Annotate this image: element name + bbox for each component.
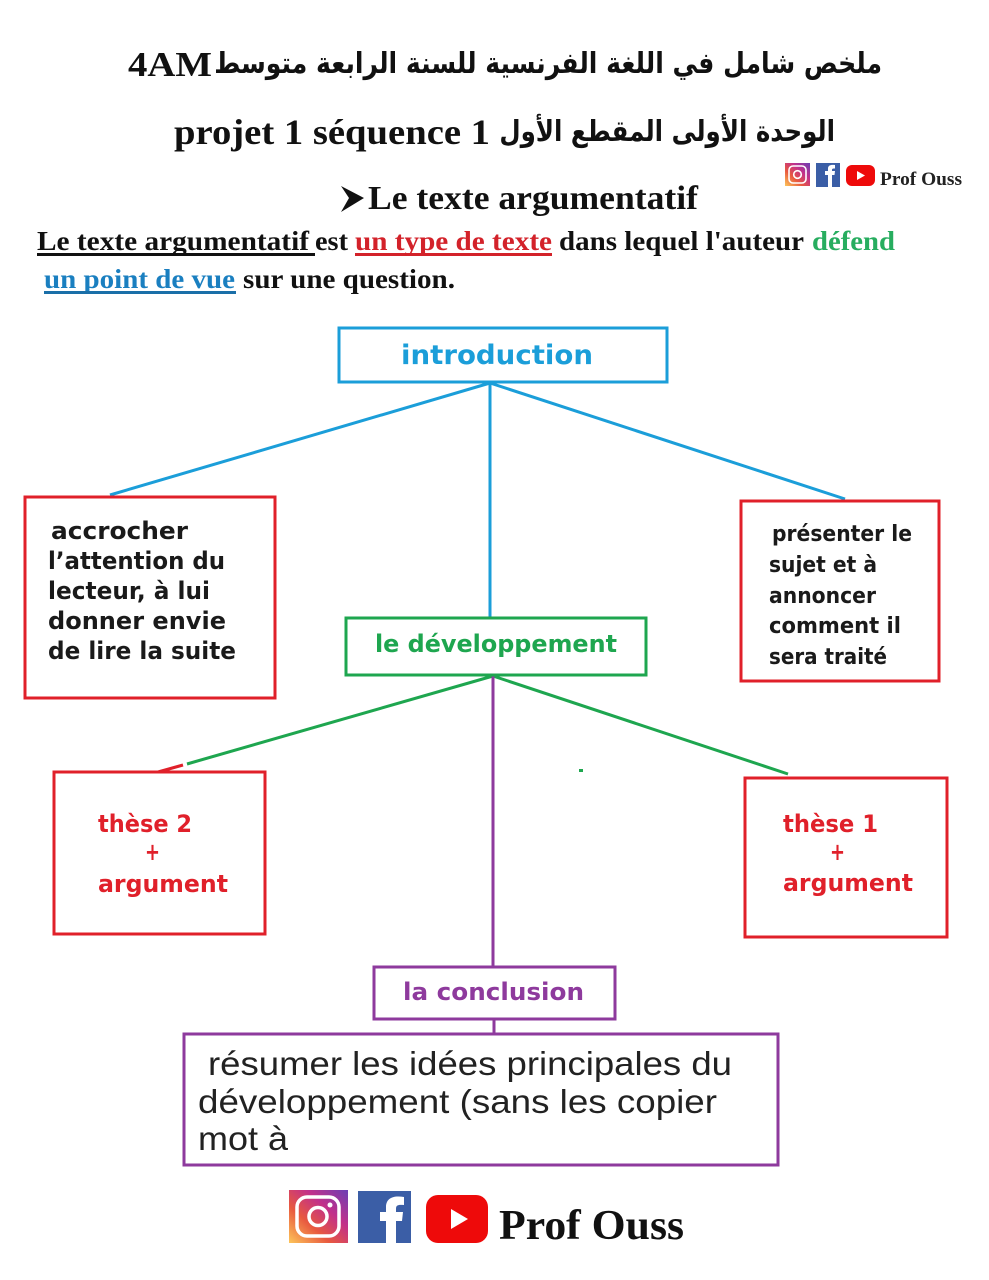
definition text: un type de texte: [355, 226, 552, 256]
box: accrocher: l’attention du: [48, 547, 225, 575]
box: introduction: [339, 328, 667, 382]
icon: instagram small: [785, 163, 810, 186]
icon: facebook small: [816, 163, 840, 187]
icon: facebook: [358, 1191, 411, 1243]
definition text: un point de vue: [44, 264, 235, 294]
box: accrocher: lecteur, à lui: [48, 577, 210, 605]
title: second line: [174, 112, 835, 152]
box: présenter le sujet: sujet et à: [769, 553, 877, 578]
box: présenter le sujet: présenter le: [772, 522, 912, 547]
title: first line: 4AM: [128, 45, 212, 84]
green dot: [579, 769, 583, 772]
definition text: est: [315, 226, 348, 256]
box: le développement: le développement: [375, 630, 617, 658]
box: thèse 1: argument: [783, 869, 913, 897]
title: second line: projet 1 séquence 1: [174, 112, 490, 152]
box: présenter le sujet: annoncer: [769, 584, 876, 609]
title: first line: ملخص شامل في اللغة الفرنسية للسنة الرابعة متوسط: [214, 47, 882, 80]
connectors: développement (green): [187, 676, 788, 774]
box: le développement: [346, 618, 646, 675]
box: résumer les idées: mot à: [198, 1120, 289, 1157]
box: résumer les idées: résumer les idées principales du: [208, 1045, 732, 1082]
box: la conclusion: [374, 967, 615, 1019]
connectors: introduction (blue): [110, 383, 845, 617]
connector: conclusion to summary: [492, 1019, 496, 1034]
box: thèse 2: thèse 2: [98, 810, 192, 838]
box: thèse 1: +: [830, 838, 845, 866]
name: bottom: Prof Ouss: [499, 1203, 684, 1249]
box: thèse 1: [745, 778, 947, 937]
connector: red fragment: [158, 765, 183, 772]
box: accrocher: [25, 497, 275, 698]
social icons and name: bottom: [289, 1190, 684, 1249]
box: accrocher: accrocher: [51, 517, 188, 545]
box: présenter le sujet: comment il: [769, 614, 901, 639]
box: accrocher: donner envie: [48, 607, 226, 635]
box: la conclusion: la conclusion: [403, 978, 584, 1006]
definition text: Le texte argumentatif: [37, 226, 310, 256]
box: présenter le sujet: [741, 501, 939, 681]
title: second line: الوحدة الأولى المقطع الأول: [499, 113, 835, 149]
box: accrocher: de lire la suite: [48, 637, 236, 665]
box: résumer les idées: [184, 1034, 778, 1165]
icon: instagram: [289, 1190, 348, 1243]
definition text: sur une question.: [243, 264, 455, 294]
name: top: Prof Ouss: [880, 169, 962, 190]
definition text: [37, 226, 895, 294]
box: thèse 2: [54, 772, 265, 934]
icon: youtube: [426, 1195, 488, 1243]
icon: youtube small: [846, 165, 875, 186]
definition text: dans lequel l'auteur: [559, 226, 804, 256]
definition text: défend: [812, 226, 895, 256]
box: thèse 1: thèse 1: [783, 810, 878, 838]
social icons and name: top: [785, 163, 962, 190]
box: introduction: introduction: [401, 340, 593, 371]
heading: le texte argumentatif: Le texte argumentatif: [368, 180, 699, 217]
box: résumer les idées: développement (sans les copier: [198, 1083, 717, 1120]
box: présenter le sujet: sera traité: [769, 645, 887, 670]
box: thèse 2: argument: [98, 870, 228, 898]
box: thèse 2: +: [145, 838, 160, 866]
connector: conclusion (purple): [492, 676, 494, 967]
